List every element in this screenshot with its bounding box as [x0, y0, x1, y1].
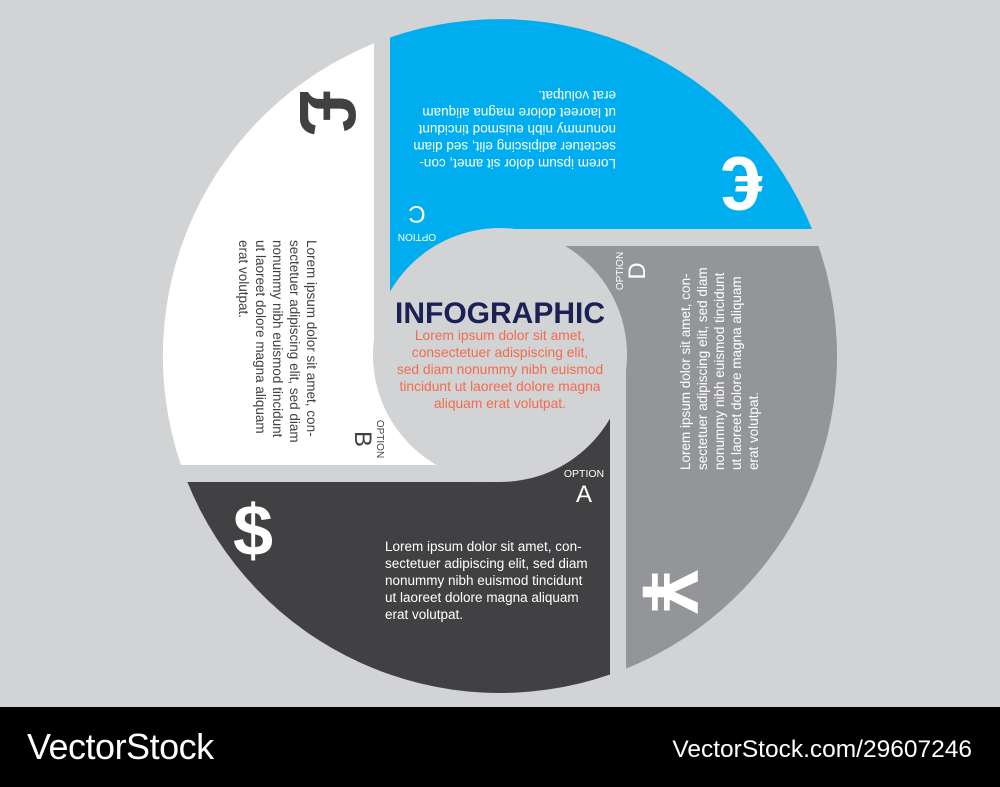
center text: sed diam nonummy nibh euismod: [397, 362, 603, 377]
center text: Lorem ipsum dolor sit amet,: [415, 328, 585, 343]
label: option A: OPTION: [564, 468, 604, 480]
panel: option D gray: [500, 246, 837, 669]
icon: pound: £: [283, 91, 372, 135]
icon: euro: €: [721, 140, 763, 225]
footer bar: VectorStock.com/29607246: [672, 736, 972, 763]
panel: option A dark: [187, 355, 610, 693]
center circle: [373, 228, 627, 482]
center text: aliquam erat volutpat.: [434, 396, 566, 411]
text: option D body: ut laoreet dolore magna aliquam: [729, 276, 744, 470]
footer bar: [0, 707, 1000, 787]
icon: dollar: $: [233, 491, 273, 571]
title: INFOGRAPHIC: [395, 297, 605, 330]
label: option D: D: [624, 262, 651, 280]
label: option B: B: [349, 431, 376, 447]
text: option B body: Lorem ipsum dolor sit amet, con-: [304, 240, 319, 437]
panel: option B white: [163, 43, 500, 465]
text: option B body: erat volutpat.: [236, 240, 251, 318]
text: option C body: [413, 88, 616, 171]
text: option A body: nonummy nibh euismod tincidunt: [385, 573, 583, 588]
center text: tincidunt ut laoreet dolore magna: [400, 379, 601, 394]
label: option C: [398, 200, 436, 242]
text: option A body: ut laoreet dolore magna aliquam: [385, 590, 579, 605]
text: option C body: nonummy nibh euismod tincidunt: [418, 122, 616, 137]
text: option B body: nonummy nibh euismod tincidunt: [270, 240, 285, 438]
label: option C: C: [408, 200, 426, 227]
text: option B body: [236, 240, 319, 443]
label: option D: [615, 252, 651, 290]
text: option A body: erat volutpat.: [385, 607, 463, 622]
text: option C body: Lorem ipsum dolor sit amet, con-: [419, 156, 616, 171]
center text: [397, 328, 603, 411]
label: option B: OPTION: [374, 420, 385, 458]
label: option A: A: [576, 481, 592, 508]
label: option B: [349, 420, 385, 458]
panel: option C blue: [390, 19, 812, 355]
text: option A body: [385, 539, 588, 622]
center text: consectetuer adispiscing elit,: [412, 345, 588, 360]
label: option A: [564, 468, 604, 508]
label: option C: OPTION: [398, 231, 436, 242]
text: option D body: sectetuer adipiscing elit, sed diam: [695, 267, 710, 470]
text: option C body: sectetuer adipiscing elit, sed diam: [413, 139, 616, 154]
text: option A body: sectetuer adipiscing elit, sed diam: [385, 556, 588, 571]
text: option C body: erat volutpat.: [538, 88, 616, 103]
text: option D body: nonummy nibh euismod tincidunt: [712, 272, 727, 470]
text: option C body: ut laoreet dolore magna aliquam: [422, 105, 616, 120]
text: option A body: Lorem ipsum dolor sit amet, con-: [385, 539, 582, 554]
text: option B body: ut laoreet dolore magna aliquam: [253, 240, 268, 434]
text: option D body: [678, 267, 761, 470]
text: option D body: erat volutpat.: [746, 392, 761, 470]
label: option D: OPTION: [615, 252, 626, 290]
icon: yen: ¥: [626, 570, 715, 615]
text: option B body: sectetuer adipiscing elit, sed diam: [287, 240, 302, 443]
footer bar: VectorStock: [27, 726, 215, 767]
text: option D body: Lorem ipsum dolor sit amet, con-: [678, 273, 693, 470]
